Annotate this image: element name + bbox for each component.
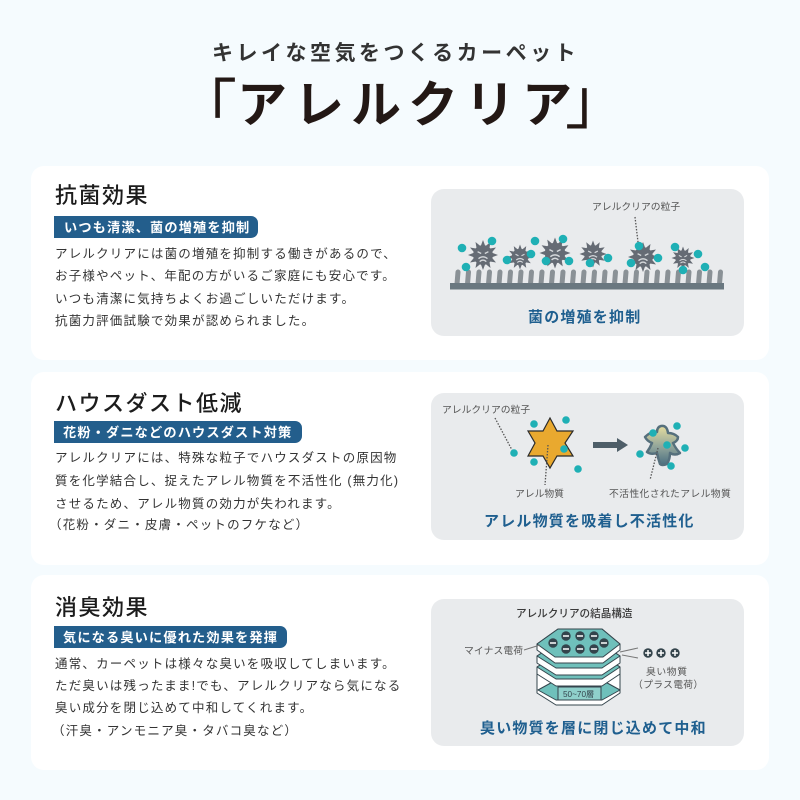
body text: 質を化学結合し、捉えたアレル物質を不活性化 (無力化) (55, 473, 399, 488)
allergen label: アレル物質 (515, 487, 564, 500)
badge (54, 626, 287, 648)
diagram: allergen inactivation (431, 393, 744, 540)
minus charge label: マイナス電荷 (464, 645, 523, 657)
body text: 臭い成分を閉じ込めて中和してくれます。 (55, 700, 313, 715)
diagram: carpet fibers and germs (431, 189, 744, 336)
odor label: （プラス電荷） (633, 679, 703, 691)
body text: いつも清潔に気持ちよくお過ごしいただけます。 (55, 291, 355, 306)
body text: 抗菌力評価試験で効果が認められました。 (55, 313, 315, 328)
badge: 花粉・ダニなどのハウスダスト対策 (63, 424, 292, 440)
panel: deodorizing effect (31, 575, 769, 770)
body text (52, 656, 401, 738)
caption: アレル物質を吸着し不活性化 (484, 512, 695, 530)
main title: ア (522, 77, 572, 133)
allergen label (515, 445, 564, 500)
particles (458, 235, 709, 274)
main title: レ (294, 77, 344, 133)
body text: アレルクリアには、特殊な粒子でハウスダストの原因物 (55, 450, 398, 465)
odor label (633, 665, 703, 691)
diagram title: アレルクリアの結晶構造 (516, 607, 633, 620)
layer count label: 50~70層 (563, 690, 594, 699)
minus charges (548, 631, 609, 654)
badge (54, 421, 302, 443)
badge: いつも清潔、菌の増殖を抑制 (64, 219, 250, 235)
body text: （汗臭・アンモニア臭・タバコ臭など） (52, 724, 298, 738)
particle label (442, 403, 530, 450)
heading: 消臭効果 (55, 595, 149, 620)
germs (468, 238, 694, 272)
body text: させるため、アレル物質の効力が失われます。 (55, 496, 341, 511)
particles around blob (636, 422, 689, 470)
particles around star (510, 416, 582, 473)
main title: ア (237, 77, 287, 133)
inactivated allergen label (609, 448, 731, 500)
card background (31, 166, 769, 360)
plus charges (643, 648, 680, 658)
odor label: 臭い物質 (646, 665, 688, 678)
carpet fibers (457, 272, 720, 284)
pointer lines (620, 648, 638, 658)
diagram: crystal structure (431, 599, 744, 746)
badge (54, 216, 258, 238)
crystal layers (537, 629, 620, 705)
carpet base (450, 283, 724, 290)
main title: 」 (565, 68, 627, 137)
arrow (593, 438, 628, 452)
badge: 気になる臭いに優れた効果を発揮 (63, 629, 278, 645)
card background (31, 372, 769, 565)
card background (31, 575, 769, 770)
icon: inactivated allergen (645, 426, 680, 465)
title (175, 42, 627, 144)
icon: allergen star (528, 418, 573, 468)
body text (49, 450, 399, 532)
caption: 臭い物質を層に閉じ込めて中和 (480, 719, 707, 737)
body text: （花粉・ダニ・皮膚・ペットのフケなど） (49, 517, 309, 532)
subtitle: キレイな空気をつくるカーペット (212, 42, 579, 65)
body text: アレルクリアには菌の増殖を抑制する働きがあるので、 (55, 246, 397, 261)
main title: リ (465, 77, 515, 133)
panel: house dust reduction (31, 372, 769, 565)
body text: ただ臭いは残ったまま!でも、アレルクリアなら気になる (55, 678, 401, 693)
inactivated allergen label: 不活性化されたアレル物質 (609, 487, 731, 500)
heading: ハウスダスト低減 (55, 391, 243, 416)
body text (55, 246, 397, 328)
caption: 菌の増殖を抑制 (528, 308, 641, 326)
body text: 通常、カーペットは様々な臭いを吸収してしまいます。 (55, 656, 396, 671)
body text: お子様やペット、年配の方がいるご家庭にも安心です。 (55, 268, 396, 283)
heading: 抗菌効果 (55, 183, 149, 208)
particle label: アレルクリアの粒子 (442, 403, 530, 416)
particle label: アレルクリアの粒子 (592, 200, 680, 213)
panel: antibacterial effect (31, 166, 769, 360)
main title: 「 (175, 75, 237, 144)
main title: ル (351, 77, 401, 133)
particle label (592, 200, 680, 242)
main title: ク (408, 77, 458, 133)
